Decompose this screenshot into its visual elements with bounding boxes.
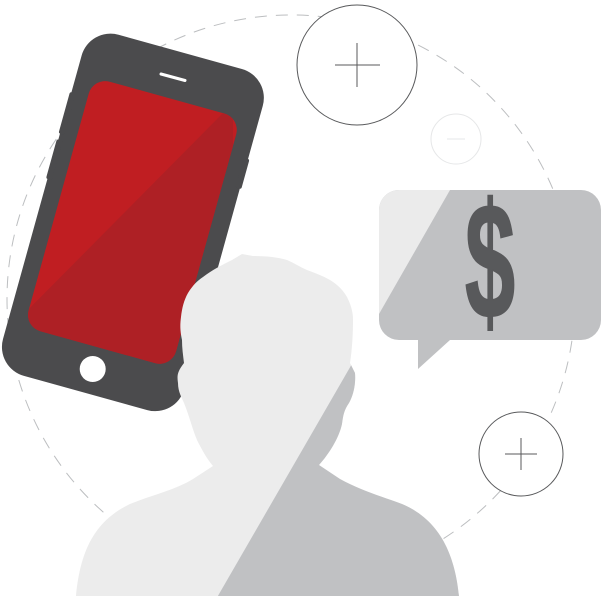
- phone speaker: [161, 74, 185, 80]
- bubble light facet: [379, 190, 450, 314]
- icon: faint minus circle: [431, 114, 481, 164]
- phone screen: [28, 81, 237, 364]
- icon: small plus circle: [479, 412, 563, 496]
- phone home button: [80, 356, 106, 382]
- bubble dark: [379, 190, 601, 369]
- phone body with side buttons: [0, 26, 272, 418]
- icon: smartphone: [0, 26, 272, 418]
- icon: speech bubble with dollar sign: [379, 169, 601, 369]
- person shaded half: [218, 365, 459, 596]
- dollar sign: $: [465, 169, 515, 354]
- icon: person silhouette: [76, 254, 480, 601]
- icon: large plus circle: [297, 5, 417, 125]
